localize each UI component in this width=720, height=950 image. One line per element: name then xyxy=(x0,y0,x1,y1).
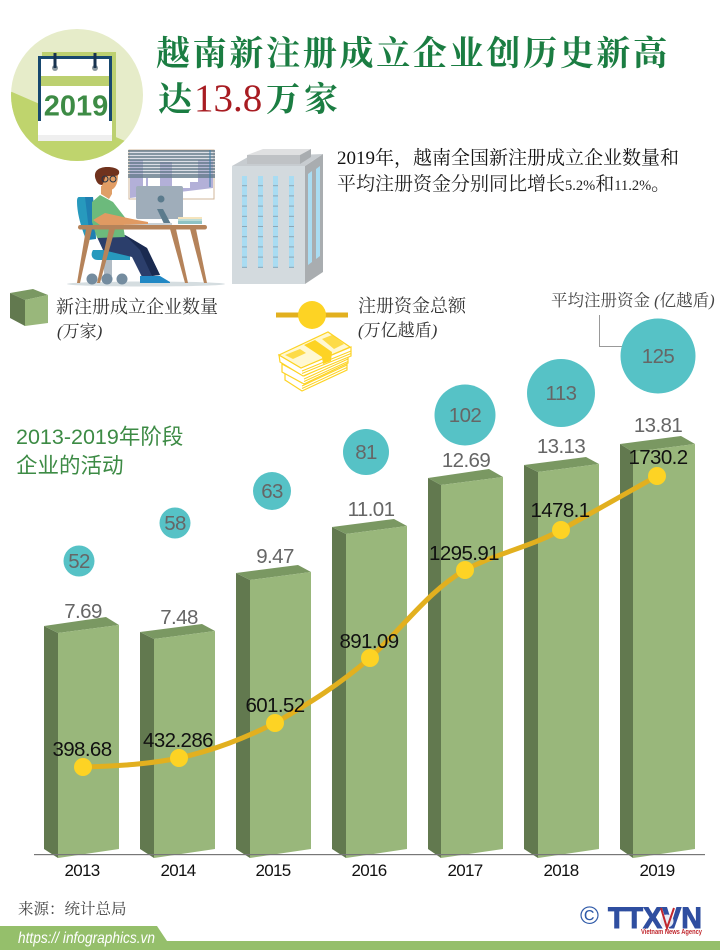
year axis labels: 2014 xyxy=(160,861,196,880)
line chart: total registered capital: 432.286 xyxy=(143,729,213,752)
bar value labels: 11.01 xyxy=(348,498,395,521)
legend: enterprises cube: (万家) xyxy=(57,322,103,341)
window with blinds xyxy=(128,150,215,199)
bar 2014 xyxy=(140,624,215,858)
bar value labels: 7.48 xyxy=(160,606,198,629)
legend: enterprises cube: 新注册成立企业数量 xyxy=(56,297,218,317)
bar 2016 xyxy=(332,519,407,858)
bubbles: average registered capital: 125 xyxy=(642,345,674,368)
title: 万家 xyxy=(266,72,342,121)
source: 来源：统计总局 xyxy=(18,900,127,918)
line chart: total registered capital: 1730.2 xyxy=(628,446,688,469)
logo: TTXVN: Vietnam News Agency xyxy=(641,929,702,936)
bar value labels xyxy=(64,414,682,629)
year axis labels: 2016 xyxy=(351,861,387,880)
bubbles: average registered capital xyxy=(64,318,696,576)
line chart: total registered capital: 398.68 xyxy=(52,738,112,761)
bar value labels: 7.69 xyxy=(64,600,102,623)
bubbles: average registered capital: 58 xyxy=(164,512,186,535)
icon: money stacks xyxy=(279,332,351,391)
year axis labels: 2017 xyxy=(447,861,483,880)
heading: chart title: 2013-2019年阶段 xyxy=(16,425,183,449)
year axis labels: 2013 xyxy=(64,861,100,880)
intro text xyxy=(337,147,679,195)
year axis labels xyxy=(64,861,675,880)
bar 2013 xyxy=(44,617,119,858)
callout: average capital label xyxy=(551,291,715,346)
legend: registered capital: (万亿越盾) xyxy=(358,321,438,340)
legend: registered capital xyxy=(276,296,467,340)
bar 2019 xyxy=(620,436,695,858)
line chart: total registered capital: 1295.91 xyxy=(429,542,499,565)
logo: TTXVN: TTXVN xyxy=(608,902,702,935)
chair xyxy=(77,197,130,284)
bar 2018 xyxy=(524,457,599,858)
axis line xyxy=(34,854,705,855)
monitor xyxy=(125,186,183,226)
bar value labels: 13.81 xyxy=(634,414,682,437)
trousers and shoes xyxy=(97,235,170,283)
icon: calendar 2019: 2019 xyxy=(44,90,108,122)
year axis labels: 2018 xyxy=(543,861,579,880)
legend: enterprises cube xyxy=(10,289,218,341)
legend: registered capital: 注册资金总额 xyxy=(358,296,467,316)
intro text: 平均注册资金分别同比增长5.2%和11.2%。 xyxy=(337,173,670,195)
bubbles: average registered capital: 52 xyxy=(68,550,90,573)
bar 2017 xyxy=(428,469,503,858)
floor shadow xyxy=(67,282,225,286)
bar chart xyxy=(34,436,705,858)
footer bar: https:// infographics.vn xyxy=(18,930,155,947)
footer bar xyxy=(0,926,720,950)
bubbles: average registered capital: 102 xyxy=(449,404,481,427)
heading: chart title xyxy=(16,425,183,478)
title xyxy=(156,26,670,121)
desk xyxy=(77,225,207,283)
bar value labels: 12.69 xyxy=(442,449,490,472)
bar value labels: 13.13 xyxy=(537,435,585,458)
bar value labels: 9.47 xyxy=(256,545,294,568)
icon: office building xyxy=(232,149,323,284)
line chart: total registered capital: 891.09 xyxy=(339,630,399,653)
line chart: total registered capital: 1478.1 xyxy=(530,499,590,522)
heading: chart title: 企业的活动 xyxy=(16,454,124,478)
intro text: 2019年，越南全国新注册成立企业数量和 xyxy=(337,147,679,169)
books xyxy=(178,217,202,219)
title: 越南新注册成立企业创历史新高 xyxy=(156,26,670,75)
line chart: total registered capital: 601.52 xyxy=(245,694,305,717)
bubbles: average registered capital: 113 xyxy=(546,382,577,405)
bubbles: average registered capital: 63 xyxy=(261,480,283,503)
line chart: total registered capital xyxy=(52,446,688,776)
icon: calendar 2019 xyxy=(11,29,143,161)
bubbles: average registered capital: 81 xyxy=(355,441,377,464)
year axis labels: 2015 xyxy=(255,861,291,880)
title: 13.8 xyxy=(194,77,262,120)
body xyxy=(92,167,148,238)
logo: TTXVN: © xyxy=(580,902,600,930)
icon: office worker at desk xyxy=(67,150,225,286)
year axis labels: 2019 xyxy=(639,861,675,880)
callout: average capital label: 平均注册资金 (亿越盾) xyxy=(551,291,715,310)
title: 达 xyxy=(158,72,194,121)
bar 2015 xyxy=(236,565,311,858)
